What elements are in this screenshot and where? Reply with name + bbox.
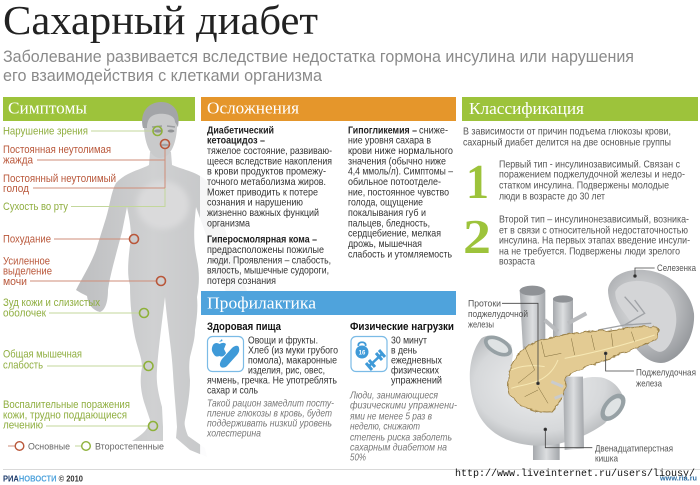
symptom labels: оболочек: [3, 308, 46, 320]
anatomy labels: кишка: [595, 454, 619, 464]
symptom labels: Постоянная неутолимая: [3, 144, 111, 156]
footer logo: РИАНОВОСТИ © 2010: [3, 474, 83, 484]
chest highlight: [137, 181, 189, 229]
prevention: healthy food: [206, 321, 338, 440]
symptom labels: выделение: [3, 266, 52, 278]
text: complications left column: вялость, мышечные судороги,: [207, 266, 329, 276]
symptom labels: Воспалительные поражения: [3, 399, 130, 411]
prevention: healthy food: сахар и соль: [207, 386, 258, 396]
spleen: [598, 270, 694, 363]
prevention: physical exercise: упражнений: [391, 376, 442, 386]
text: complications right column: 4,4 ммоль/л). Симптомы –: [348, 166, 453, 178]
symptom labels: жажда: [3, 154, 33, 166]
text: complications right column: обильное потоотделе-: [348, 176, 441, 188]
symptom labels: кожи, трудно поддающиеся: [3, 410, 127, 422]
symptom labels: Похудание: [3, 234, 51, 246]
symptom markers: [130, 126, 170, 430]
text: complications right column: голода, ощущение: [348, 198, 423, 208]
text: complications right column: ние, постоянное чувство: [348, 188, 449, 198]
text: complications left column: жизненно важных функций: [207, 207, 319, 219]
symptom labels: Нарушение зрения: [3, 126, 88, 138]
classification intro: [463, 126, 671, 148]
prevention: physical exercise: [349, 321, 457, 464]
text: complications right column: значения (обычно ниже: [348, 156, 446, 168]
lower veil: [201, 316, 457, 466]
legend: Второстепенные: [95, 442, 164, 452]
symptom labels: мочи: [3, 276, 27, 288]
panel: complications heading: Осложнения: [207, 98, 299, 118]
text: complications left column: кетоацидоз –: [207, 136, 265, 146]
anatomy labels: железа: [636, 378, 663, 390]
ria.ru mark: www.ria.ru: [659, 474, 697, 482]
prevention: physical exercise: физических: [391, 364, 440, 376]
anatomy labels: Протоки: [468, 298, 501, 310]
prevention: healthy food: изделия, рис, овес,: [248, 366, 325, 376]
subtitle: его взаимодействия с клетками организма: [3, 67, 323, 85]
prevention: healthy food: Хлеб (из муки грубого: [248, 344, 338, 356]
text: complications left column: точного метаболизма жиров.: [207, 176, 326, 188]
symptom labels: Сухость во рту: [3, 201, 69, 213]
prevention: healthy food: поддерживать низкий уровень: [207, 418, 332, 430]
legend: Основные: [28, 442, 70, 452]
text: complications right column: покалывания губ и: [348, 207, 426, 219]
symptom labels: голод: [3, 183, 30, 195]
text: complications left column: организма: [207, 218, 250, 230]
panel: classification heading: [462, 97, 698, 121]
prevention: healthy food: ячмень, гречка. Не употреблять: [207, 374, 337, 386]
text: complications left column: сознания и нарушению: [207, 198, 303, 208]
prevention: physical exercise: в день: [391, 346, 417, 356]
pancreas anatomy illustration: [470, 268, 694, 460]
symptom labels: Усиленное: [3, 256, 50, 268]
symptom labels: Общая мышечная: [3, 348, 82, 360]
panel: prevention heading: Профилактика: [207, 294, 317, 312]
panel: symptoms heading: Симптомы: [8, 98, 87, 118]
classification intro: В зависимости от причин подъема глюкозы крови,: [463, 126, 671, 138]
text: complications right column: [348, 126, 453, 260]
symptom labels: слабость: [3, 360, 43, 372]
text: complications left column: Может приводить к потере: [207, 188, 318, 198]
text: complications right column: Гипогликемия –: [348, 126, 417, 136]
classification intro: сахарный диабет делится на две основные группы: [463, 136, 671, 148]
prevention: physical exercise: Физические нагрузки: [350, 321, 454, 333]
icon: kettlebell and dumbbell: [351, 336, 387, 372]
type 1 description: [499, 160, 685, 202]
text: complications left column: тяжелое состояние, развиваю-: [207, 146, 332, 157]
prevention: healthy food: Такой рацион замедлит посту-: [207, 398, 334, 410]
prevention: physical exercise: физическими упражнени-: [350, 400, 457, 412]
number 2: 2: [463, 209, 491, 264]
text: complications left column: потеря сознания: [207, 276, 276, 287]
text: complications left column: [207, 124, 332, 287]
text: complications right column: ние уровня сахара в: [348, 136, 431, 146]
anatomy labels: Двенадцатиперстная: [595, 444, 673, 454]
type 1 description: люди в возрасте до 30 лет: [499, 192, 605, 202]
anatomy labels: поджелудочной: [468, 309, 528, 320]
prevention: physical exercise: сахарным диабетом на: [350, 442, 447, 454]
prevention: physical exercise: ежедневных: [391, 356, 443, 366]
text: complications left column: в крови продуктов промежу-: [207, 166, 326, 178]
callout leader lines: [502, 268, 655, 448]
text: complications left column: предрасположены пожилые: [207, 245, 324, 256]
type 1 description: статком инсулина. Подвержены молодые: [499, 180, 669, 192]
icon: apple and bread: [208, 336, 244, 372]
prevention: healthy food: помола), макаронные: [248, 356, 337, 366]
subtitle: [3, 48, 634, 85]
duodenum: [470, 331, 630, 446]
symptom labels: Постоянный неутолимый: [3, 173, 116, 185]
panel: complications heading: [201, 97, 456, 121]
symptom labels: лечению: [3, 420, 43, 432]
number 1: 1: [466, 154, 489, 209]
prevention: healthy food: пление глюкозы в кровь, будет: [207, 408, 332, 420]
text: complications right column: дрожь, мышечная: [348, 239, 422, 250]
text: complications right column: пальцев, бледность,: [348, 218, 430, 230]
panel: symptoms heading: [3, 97, 195, 121]
human body figure: [76, 102, 457, 482]
legend: [8, 442, 164, 452]
vessels: [520, 286, 586, 460]
ducts below pancreas: [551, 382, 563, 398]
text: complications left column: Гиперосмолярная кома –: [207, 234, 317, 246]
prevention: healthy food: Овощи и фрукты.: [248, 334, 318, 346]
prevention: physical exercise: 30 минут: [391, 336, 427, 346]
type 2 description: возраста: [499, 256, 535, 268]
panel: prevention heading: [201, 291, 456, 315]
text: complications right column: слабость и утомляемость: [348, 248, 452, 260]
watermark url: http://www.liveinternet.ru/users/liousy/: [455, 468, 695, 480]
prevention: healthy food: холестерина: [206, 428, 261, 440]
prevention: physical exercise: 50%: [350, 452, 366, 464]
prevention: physical exercise: степень риска заболеть: [350, 432, 452, 444]
prevention: physical exercise: неделю, снижают: [350, 422, 420, 432]
pancreas: [508, 327, 659, 412]
type 2 description: [499, 214, 690, 268]
text: complications right column: сниже-: [419, 126, 448, 136]
symptom labels: [3, 126, 130, 432]
panel: classification heading: Классификация: [469, 99, 584, 118]
symptom labels: Зуд кожи и слизистых: [3, 297, 101, 309]
text: complications left column: люди. Проявления – слабость,: [207, 254, 331, 266]
subtitle: Заболевание развивается вследствие недостатка гормона инсулина или нарушения: [3, 48, 634, 66]
white veil over the right arm: [200, 122, 456, 482]
anatomy labels: [468, 263, 697, 464]
icon: kettlebell and dumbbell: 16: [359, 350, 366, 356]
text: complications right column: сердцебиение, мелкая: [348, 228, 441, 240]
central vessel: [563, 377, 584, 450]
footer rule: [3, 469, 700, 470]
symptom connector lines: [30, 131, 165, 426]
prevention: physical exercise: ями не менее 5 раз в: [349, 412, 432, 422]
text: complications right column: крови ниже нормального: [348, 146, 453, 157]
text: complications left column: Диабетический: [207, 124, 274, 136]
text: complications left column: щееся вследствие накопления: [207, 156, 332, 168]
prevention: physical exercise: Люди, занимающиеся: [349, 390, 438, 402]
hair: [142, 102, 179, 128]
anatomy labels: железы: [468, 320, 494, 330]
face: [152, 126, 175, 146]
prevention: healthy food: Здоровая пища: [207, 321, 282, 333]
head: [143, 103, 178, 158]
